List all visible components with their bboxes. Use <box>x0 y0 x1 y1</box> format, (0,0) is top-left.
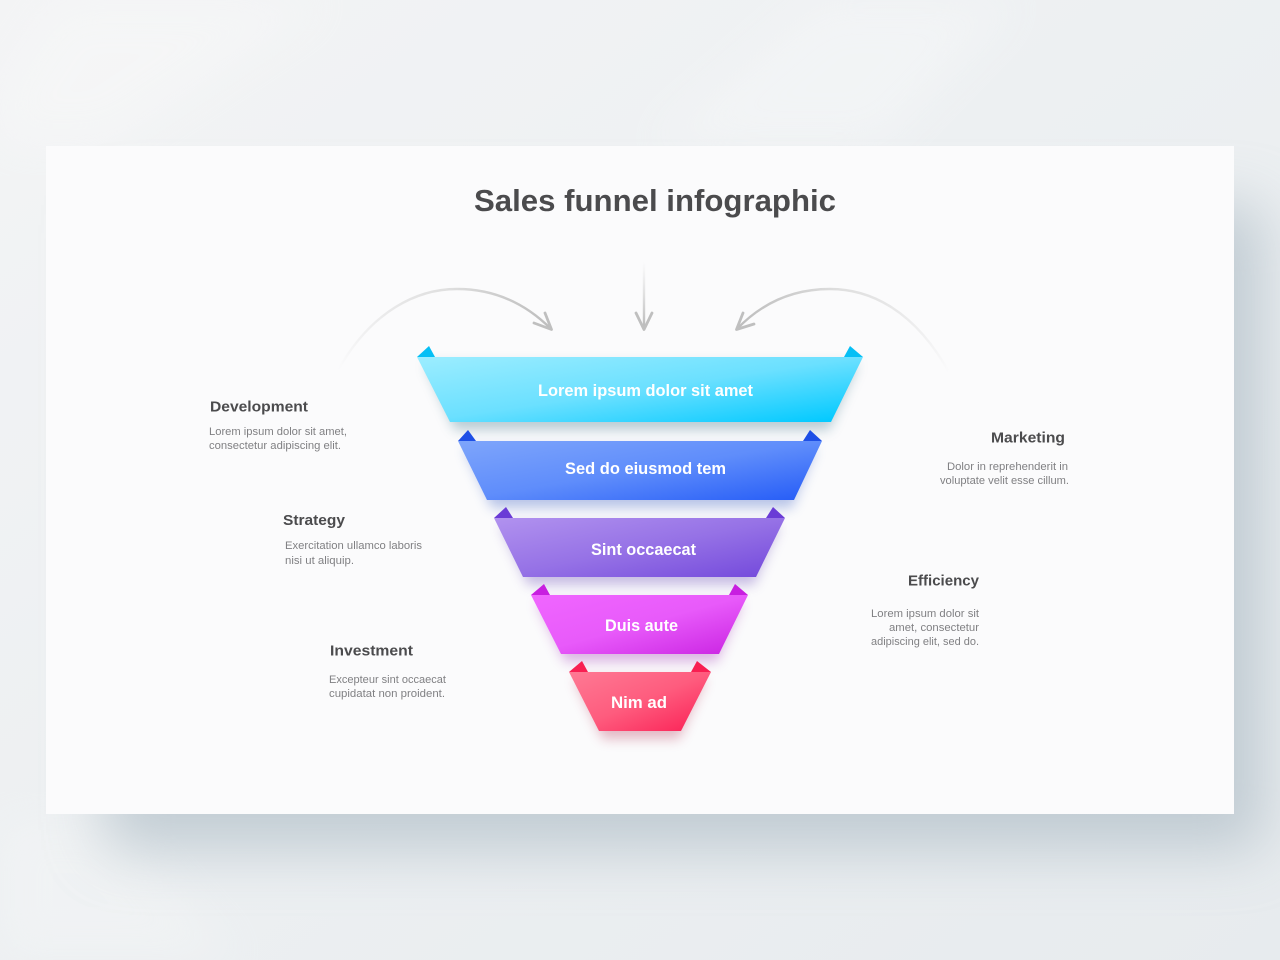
arrow: right curved <box>736 289 950 374</box>
label: Efficiency <box>871 572 980 648</box>
label: Development: consectetur adipiscing elit. <box>209 440 341 452</box>
label: Efficiency: Efficiency <box>908 572 980 590</box>
funnel <box>417 346 863 739</box>
band 4: Duis aute <box>605 617 678 635</box>
label: Marketing: Dolor in reprehenderit in <box>947 461 1068 473</box>
panel: slide <box>46 146 1234 814</box>
arrow: left curved <box>338 289 552 370</box>
arrow: centre straight <box>636 262 652 330</box>
band 3: Sint occaecat <box>591 541 696 559</box>
label: Marketing: voluptate velit esse cillum. <box>940 475 1069 487</box>
band 4 <box>531 584 748 662</box>
label: Investment <box>329 642 446 700</box>
label: Marketing <box>940 430 1069 487</box>
label: Development <box>209 398 347 452</box>
band 3 <box>494 507 785 585</box>
label: Development: Lorem ipsum dolor sit amet, <box>209 426 347 438</box>
label: Strategy: Strategy <box>283 512 346 529</box>
label: Efficiency: amet, consectetur <box>889 622 979 634</box>
label: Strategy <box>283 512 423 567</box>
panel shadow <box>104 205 1264 850</box>
band 1 <box>417 346 863 430</box>
label: Marketing: Marketing <box>991 430 1065 446</box>
label: Strategy: nisi ut aliquip. <box>285 555 354 567</box>
band 1: Lorem ipsum dolor sit amet <box>538 382 753 400</box>
label: Investment: Excepteur sint occaecat <box>329 674 446 686</box>
label: Strategy: Exercitation ullamco laboris <box>285 540 423 552</box>
band 2: Sed do eiusmod tem <box>565 460 726 478</box>
title: Sales funnel infographic <box>474 183 836 218</box>
band 2 <box>458 430 822 508</box>
label: Development: Development <box>210 398 308 416</box>
label: Efficiency: adipiscing elit, sed do. <box>871 636 979 648</box>
label: Efficiency: Lorem ipsum dolor sit <box>871 608 979 620</box>
band 5 <box>569 661 711 739</box>
band 5: Nim ad <box>611 694 667 712</box>
label: Investment: Investment <box>330 642 413 660</box>
label: Investment: cupidatat non proident. <box>329 688 445 700</box>
